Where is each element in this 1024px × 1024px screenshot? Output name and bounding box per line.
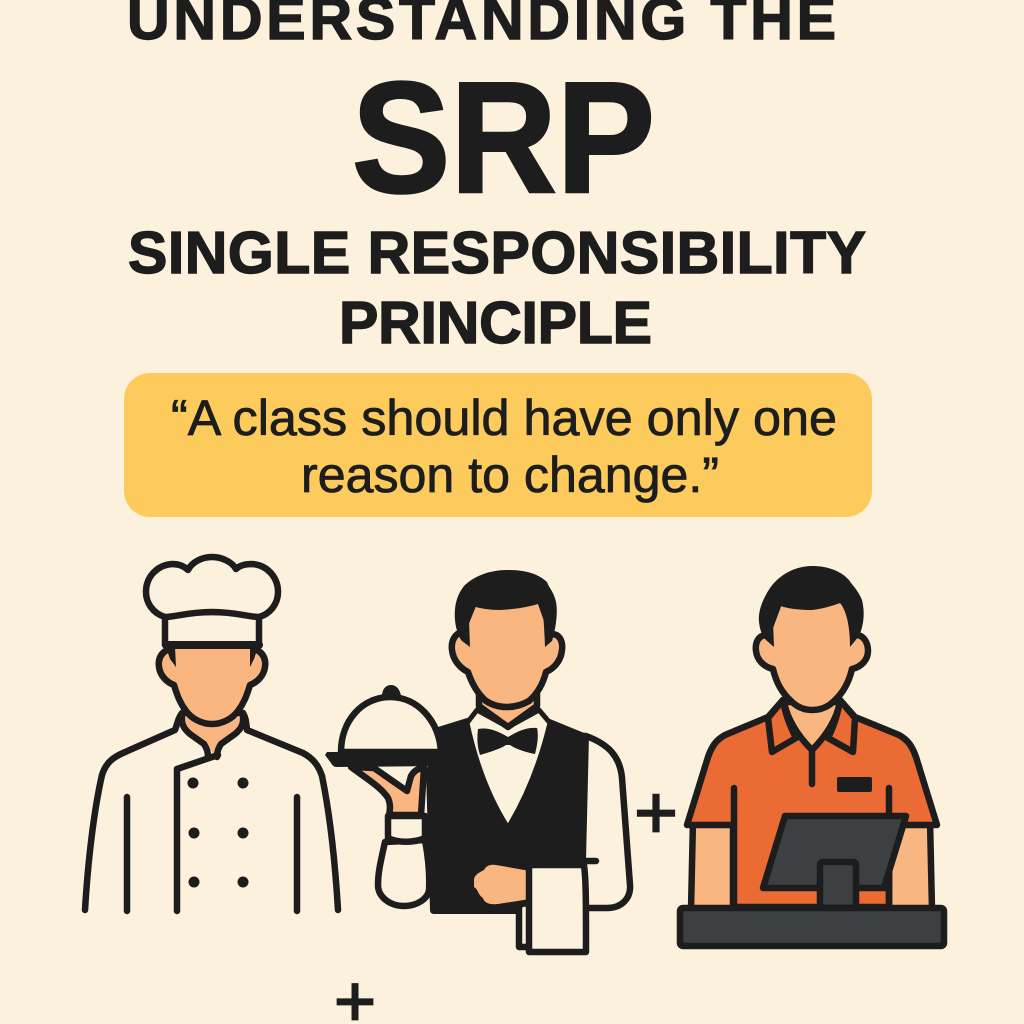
icon: chef [85, 557, 338, 911]
chef jacket [85, 713, 338, 910]
cloche dome [341, 697, 441, 752]
cashier collar right [828, 700, 855, 752]
waiter bow tie [477, 728, 538, 755]
waiter neck [479, 692, 537, 727]
heading: SRP: SRP [352, 50, 655, 226]
waiter fist [474, 865, 530, 904]
cashier monitor stand [820, 862, 856, 908]
waiter arm strap [584, 858, 596, 864]
chef hat band [165, 612, 259, 645]
cloche tray [325, 752, 442, 767]
waiter cuff [388, 816, 425, 842]
waiter towel back [519, 903, 532, 947]
cashier head [756, 600, 868, 710]
quote line 2: reason to change.” [301, 447, 719, 503]
cashier name badge [837, 777, 872, 792]
cashier placket [809, 750, 815, 784]
chef sideburns [166, 647, 258, 667]
cashier hair [759, 566, 864, 647]
waiter right sleeve [580, 736, 630, 908]
chef hat [146, 557, 278, 617]
chef front flap [177, 755, 218, 911]
chef head [159, 645, 265, 724]
waiter shirt [467, 710, 550, 828]
waiter hand [351, 767, 424, 815]
cashier arms [691, 820, 932, 910]
callout: quote [124, 373, 872, 517]
cashier collar left [768, 700, 796, 752]
icon: cashier [680, 566, 944, 946]
cashier side lines [734, 788, 889, 907]
chef collar [182, 716, 243, 757]
waiter towel [529, 865, 586, 952]
chef buttons [188, 778, 248, 888]
cashier monitor [763, 816, 906, 888]
waiter head [452, 600, 562, 707]
chef neck [183, 716, 241, 754]
waiter vest [426, 718, 589, 914]
chef sleeve lines [127, 797, 297, 911]
plus sign: between waiter and cashier: + [634, 770, 678, 854]
heading: single responsibility: SINGLE RESPONSIBILITY [128, 220, 866, 286]
quote line 1: “A class should have only one [171, 390, 837, 446]
icon: waiter [325, 570, 630, 952]
waiter left sleeve [378, 840, 429, 906]
cashier counter [680, 908, 944, 946]
title block [127, 0, 866, 356]
cashier shirt [687, 700, 937, 907]
cloche knob [382, 685, 401, 696]
cashier neck [784, 702, 840, 750]
heading: principle: PRINCIPLE [339, 290, 652, 356]
waiter hair [455, 570, 557, 647]
